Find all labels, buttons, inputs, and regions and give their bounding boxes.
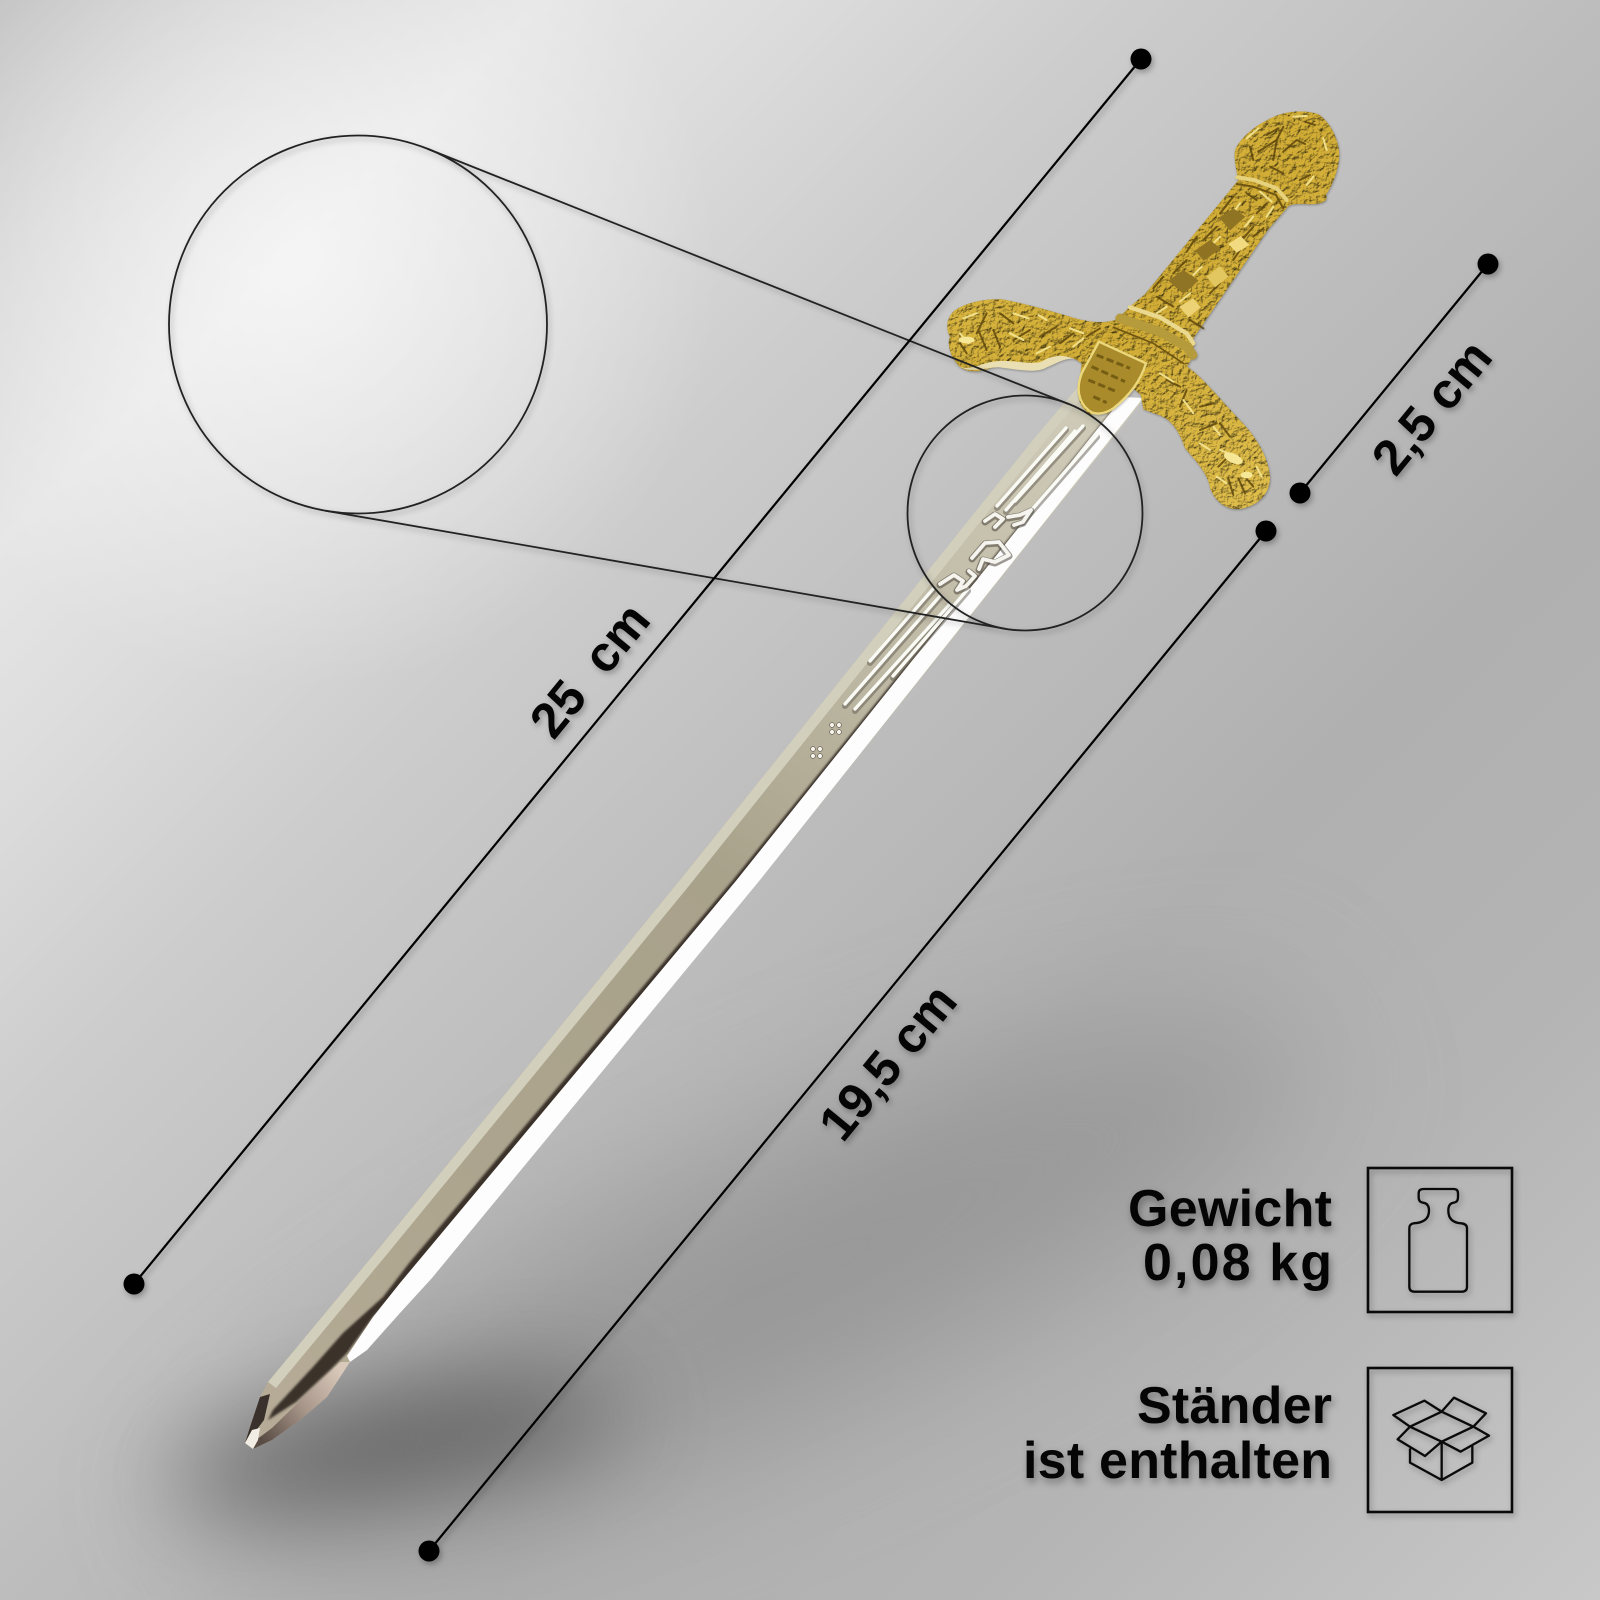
sword (245, 111, 1339, 1449)
grip lattice diamonds (1168, 208, 1249, 317)
hilt (947, 111, 1339, 509)
stand label: Ständer (1137, 1377, 1332, 1435)
large detail circle (169, 136, 547, 514)
blade dots (811, 723, 841, 758)
weight label: 0,08 kg (1143, 1234, 1332, 1292)
shaded texture strokes (960, 122, 1315, 495)
grip bands (1113, 177, 1287, 363)
dark edge strip (268, 397, 1126, 1420)
guard underside (955, 356, 1075, 371)
dimension: blade length 19,5 cm: 19,5 cm (808, 974, 968, 1151)
blade bevel (268, 388, 1086, 1388)
zoom circles with connector lines (169, 136, 1142, 630)
white edge strip (347, 397, 1143, 1362)
icon: weight in box (1368, 1168, 1512, 1312)
lion head highlights (959, 337, 1253, 478)
dimension: blade length 19,5 cm (418, 520, 1276, 1562)
stand info (1023, 1368, 1512, 1512)
icon: open box (1368, 1368, 1512, 1512)
stand label: ist enthalten (1023, 1432, 1332, 1490)
fuller grooves (845, 426, 1097, 711)
weight info (1128, 1168, 1512, 1312)
gold hilt body (947, 111, 1339, 509)
highlight texture strokes (960, 116, 1327, 483)
dimension: total length 25 cm (124, 48, 1152, 1294)
blade emblem (940, 510, 1031, 591)
weight label: Gewicht (1128, 1180, 1332, 1238)
lower connector line (326, 511, 1005, 629)
blade (245, 388, 1143, 1449)
dimension: guard width 2,5 cm: 2,5 cm (1361, 329, 1503, 485)
shield crest (1079, 342, 1146, 414)
stand label (1023, 1377, 1332, 1490)
small detail circle (908, 396, 1142, 630)
tip lower metal (253, 1362, 350, 1449)
upper connector line (428, 149, 1068, 404)
weight label (1128, 1180, 1332, 1292)
dimension: guard width 2,5 cm (1290, 254, 1503, 504)
dimension: total length 25 cm: 25 cm (519, 592, 661, 748)
tip highlight (245, 1394, 270, 1443)
